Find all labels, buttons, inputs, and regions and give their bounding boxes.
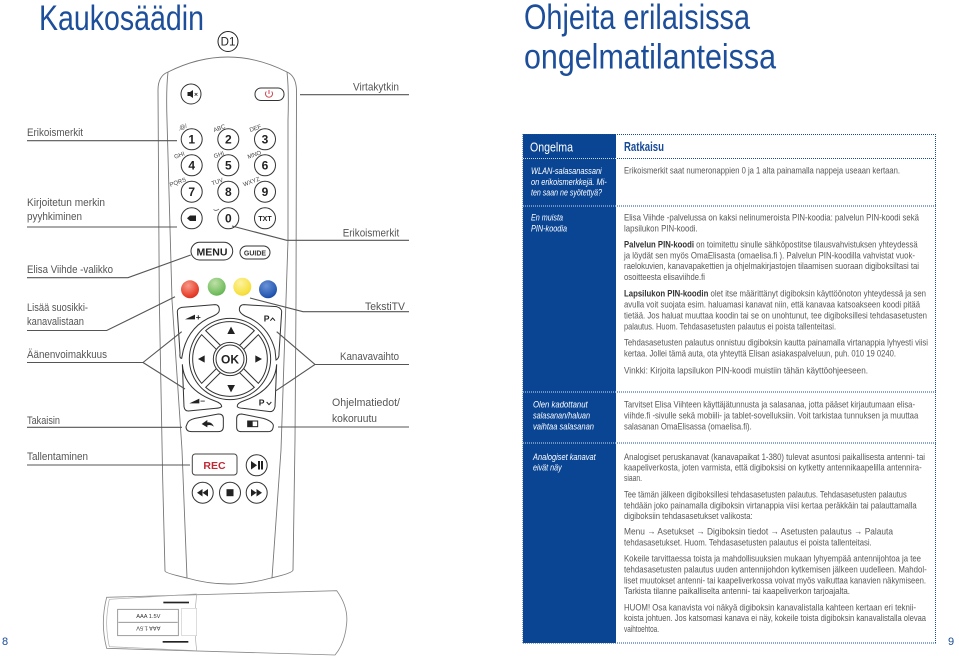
button: power xyxy=(255,88,284,100)
button: mute: × xyxy=(194,92,198,98)
problem: analog channels: Analogiset kanavat xyxy=(532,452,596,462)
back button xyxy=(186,414,223,432)
fullscreen icon xyxy=(248,421,258,427)
volume and channel glyphs xyxy=(185,315,199,403)
solution: analog channels: vaihtoehtoa. xyxy=(624,624,659,634)
battery cover: AAA 1.5V xyxy=(136,614,161,620)
control cluster: volume, channel, d-pad xyxy=(177,305,282,432)
problem: WLAN: ten saan ne syötettyä? xyxy=(531,188,603,198)
buttons: menu and guide: GUIDE xyxy=(244,250,266,258)
page number 8: 8 xyxy=(2,636,8,648)
solution: PIN: Palvelun PIN-koodi on toimitettu sinulle sähköpostitse tilausvahvistuksen yhteydessä xyxy=(624,240,918,250)
numeric keypad: TXT xyxy=(258,216,272,223)
solution: PIN: Lapsilukon PIN-koodin olet itse määrittänyt digiboksin käyttöönoton yhteydessä ja sen xyxy=(624,289,926,299)
problem: WLAN xyxy=(531,166,607,198)
callout labels: right: Ohjelmatiedot/ xyxy=(332,397,401,409)
table background: problem column xyxy=(523,134,616,643)
buttons: menu and guide xyxy=(191,242,270,260)
problem: PIN xyxy=(531,213,567,234)
heading: troubleshooting: ongelmatilanteissa xyxy=(524,38,776,76)
numeric keypad: DEF xyxy=(249,124,263,134)
callout labels: left: Elisa Viihde -valikko xyxy=(27,264,113,276)
control cluster: volume, channel, d-pad: P xyxy=(264,314,270,324)
solution: analog channels: tehdasasetukset. Huom. Tehdasasetusten palautus ei poista tallenteitasi. xyxy=(624,538,872,548)
badge: D1 xyxy=(218,32,238,52)
battery cover xyxy=(103,591,347,655)
channel down xyxy=(237,364,277,412)
button: record xyxy=(192,454,237,475)
back icon xyxy=(202,420,214,427)
solution: WLAN: Erikoismerkit saat numeronappien 0 ja 1 alta painamalla nappeja useaan kertaan. xyxy=(624,165,900,175)
problem: PIN: PIN-koodia xyxy=(531,224,567,234)
solution: analog channels: Menu → Asetukset → Digiboksin tiedot → Asetusten palautus → Palauta xyxy=(624,527,894,537)
solution: PIN: palautus. Huom. Tehdasasetusten palautus ei poista tallenteitasi. xyxy=(624,321,836,331)
solution: password: salasanan OmaElisassa (omaelisa.fi). xyxy=(624,421,752,431)
numeric keypad: WXYZ xyxy=(242,177,261,188)
playback buttons xyxy=(192,455,267,503)
ok label: OK xyxy=(221,352,239,366)
numeric keypad: 3 xyxy=(262,132,269,146)
numeric keypad: 8 xyxy=(225,185,232,199)
title: Kaukosäädin: Kaukosäädin xyxy=(39,0,204,38)
callout labels: left: Erikoismerkit xyxy=(27,127,83,139)
problem: WLAN: WLAN-salasanassani xyxy=(531,166,602,176)
problem: password: salasanan/haluan xyxy=(533,410,590,420)
numeric keypad: 0 xyxy=(225,212,232,226)
numeric keypad: .@/ xyxy=(177,124,188,132)
callout labels: left: Lisää suosikki- xyxy=(27,302,88,314)
battery cover: AAA 1.5V xyxy=(136,625,160,631)
numeric keypad: GHI xyxy=(174,151,186,161)
badge: D1: D1 xyxy=(221,36,235,48)
numeric keypad xyxy=(169,124,276,229)
numeric keypad: PQRS xyxy=(169,177,187,189)
channel up xyxy=(239,305,282,360)
callout labels: left: Kirjoitetun merkin xyxy=(27,197,105,209)
numeric keypad: 4 xyxy=(188,158,195,172)
problem: PIN: En muista xyxy=(531,213,563,223)
numeric keypad: TUV xyxy=(211,178,224,187)
d-pad ring xyxy=(189,318,271,400)
solution: PIN xyxy=(623,213,928,375)
callout labels: left: kanavalistaan xyxy=(27,316,84,328)
solution: analog channels: Tarkista tilanne paikalliselta antenni- tai kaapeliverkon tarjoajalta. xyxy=(624,586,850,596)
problem: WLAN: on erikoismerkkejä. Mi- xyxy=(531,177,607,187)
numeric keypad: 7 xyxy=(188,185,195,199)
problem: password xyxy=(533,400,594,432)
table header: Ongelma: Ongelma xyxy=(530,140,574,154)
buttons: menu and guide: MENU xyxy=(197,246,227,258)
control cluster: volume, channel, d-pad: P xyxy=(259,398,265,408)
problem: analog channels: eivät näy xyxy=(533,463,563,473)
callout labels: right: kokoruutu xyxy=(332,413,377,425)
numeric keypad: 9 xyxy=(262,185,269,199)
solution: PIN: lapsilukon PIN-koodi. xyxy=(624,224,698,234)
coloured buttons xyxy=(181,278,277,298)
heading: troubleshooting xyxy=(524,0,776,76)
numeric keypad: 1 xyxy=(188,132,195,146)
callout labels: right: TekstiTV xyxy=(365,301,406,313)
leader lines xyxy=(27,95,409,465)
callout labels: right xyxy=(332,82,406,425)
callout labels: left: Äänenvoimakkuus xyxy=(27,349,107,361)
volume down xyxy=(182,364,222,411)
solution: PIN: osoitteesta elisaviihde.fi xyxy=(624,272,705,282)
numeric keypad: MNO xyxy=(247,150,263,161)
control cluster: volume, channel, d-pad: – xyxy=(200,395,205,405)
control cluster: volume, channel, d-pad: + xyxy=(196,312,201,322)
callout labels: left xyxy=(27,127,113,463)
callout labels: right: Erikoismerkit xyxy=(343,228,399,240)
solution: PIN: kertaa. Jollei tämä auta, ota yhteyttä Elisan asiakaspalveluun, puh. 010 19 0240. xyxy=(624,349,896,359)
callout labels: right: Kanavavaihto xyxy=(340,351,399,363)
problem: password: vaihtaa salasanan xyxy=(533,422,594,432)
page number 9: 9 xyxy=(948,636,954,648)
solution: password xyxy=(624,400,919,431)
problem: password: Olen kadottanut xyxy=(533,400,588,410)
solution: analog channels xyxy=(624,452,927,634)
volume up xyxy=(177,305,219,358)
numeric keypad: 5 xyxy=(225,158,232,172)
numeric keypad: GHI xyxy=(213,151,226,160)
numeric keypad: 6 xyxy=(262,158,269,172)
button: record: REC xyxy=(203,460,226,472)
callout labels: left: Takaisin xyxy=(27,415,60,427)
solution: analog channels: siaan. xyxy=(624,473,642,483)
callout labels: right: Virtakytkin xyxy=(353,82,399,94)
fullscreen button xyxy=(237,414,273,432)
callout labels: left: pyyhkiminen xyxy=(27,211,82,223)
numeric keypad: 2 xyxy=(225,132,232,146)
d-pad arrows xyxy=(198,327,262,392)
problem: analog channels xyxy=(532,452,596,473)
button: mute xyxy=(181,84,201,104)
solution: analog channels: digiboksiin tehdasasetukset valikosta: xyxy=(624,511,753,521)
solution: PIN: Vinkki: Kirjoita lapsilukon PIN-koodi muistiin tähän käyttöohjeeseen. xyxy=(624,365,868,375)
numeric keypad: ABC xyxy=(213,124,227,134)
table dotted borders xyxy=(523,134,936,643)
table header: Ratkaisu: Ratkaisu xyxy=(624,140,664,154)
remote control outline xyxy=(158,57,296,584)
callout labels: left: Tallentaminen xyxy=(27,451,88,463)
